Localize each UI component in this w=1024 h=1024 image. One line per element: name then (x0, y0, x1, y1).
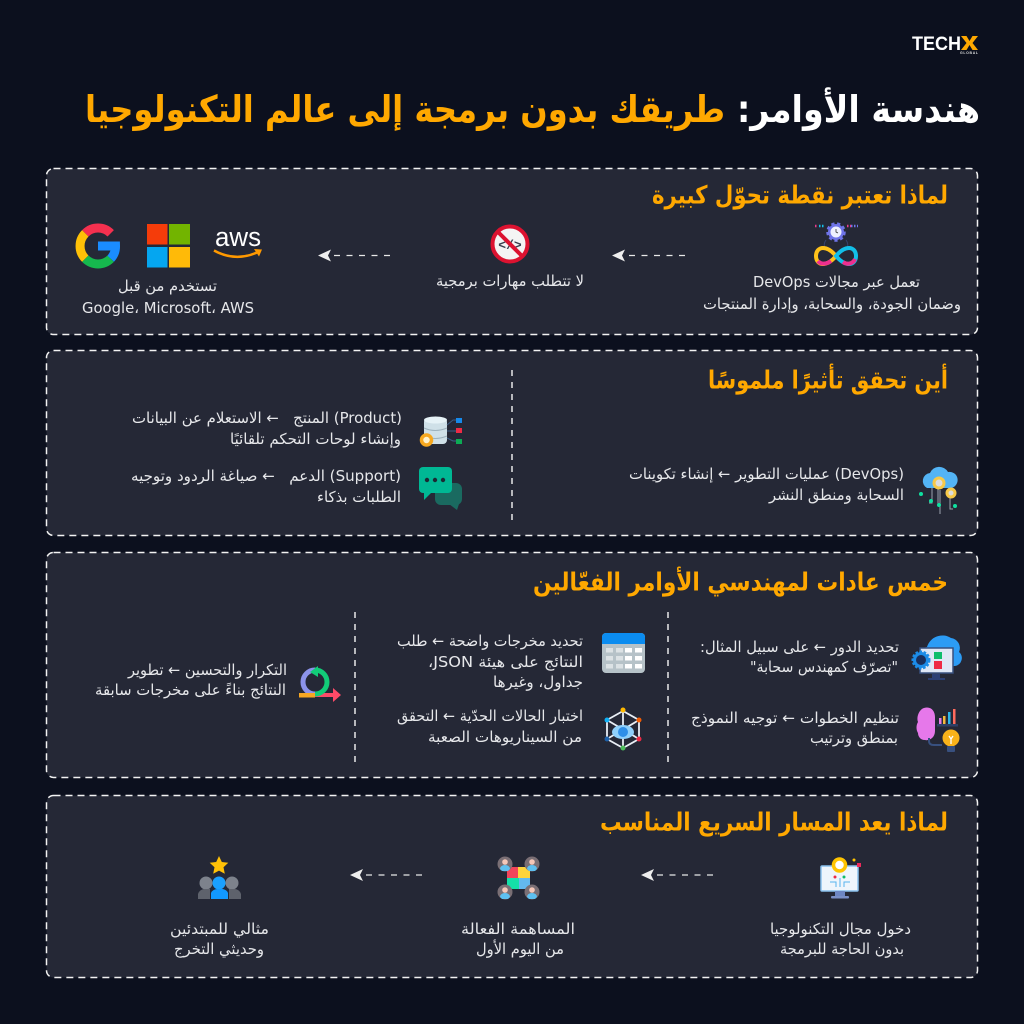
text: devops fields (703, 273, 961, 313)
text: product use: (Product) المنتج ← الاستعلام عن البيانات (132, 409, 402, 427)
text: edge cases: اختبار الحالات الحدّية ← التحقق (397, 707, 583, 725)
panel: where impact is real (46, 350, 978, 536)
arrow (318, 250, 390, 262)
icon: hexagon network (604, 708, 642, 750)
text: iterate: التكرار والتحسين ← تطوير (127, 661, 287, 679)
text: devops use: السحابة ومنطق النشر (768, 486, 904, 504)
text: ideal for beginners (170, 920, 269, 959)
text: define role (700, 638, 899, 676)
panel: fast track (46, 796, 978, 978)
text: enter tech (770, 920, 911, 958)
text: enter tech: دخول مجال التكنولوجيا (770, 920, 911, 938)
text: ideal for beginners: وحديثي التخرج (174, 940, 264, 959)
text: no programming needed: لا تتطلب مهارات برمجية (436, 272, 584, 290)
icon: iteration loop (299, 666, 341, 702)
icon: monitor with gear (821, 858, 861, 898)
title: هندسة الأوامر: (737, 86, 980, 131)
text: edge cases: من السيناريوهات الصعبة (428, 728, 582, 746)
logo: TechX Global: GLOBAL (960, 51, 979, 55)
text: clear outputs: تحديد مخرجات واضحة ← طلب (397, 632, 583, 650)
icon: aws logo: aws (215, 222, 261, 252)
icon: devops infinity gear (815, 224, 858, 264)
text: support use (131, 467, 401, 506)
text: contribute from day one: من اليوم الأول (476, 939, 564, 958)
heading: five habits: خمس عادات لمهندسي الأوامر الفعّالين (533, 566, 948, 598)
icon: no code (492, 226, 528, 262)
text: product use (132, 409, 402, 448)
heading: where impact is real: أين تحقق تأثيرًا ملموسًا (708, 364, 948, 396)
text: iterate: النتائج بناءً على مخرجات سابقة (95, 681, 286, 699)
icon: brain chart bulb (916, 708, 960, 752)
text: devops use: (DevOps) عمليات التطوير ← إنشاء تكوينات (629, 465, 904, 483)
text: devops fields: وضمان الجودة، والسحابة، وإدارة المنتجات (703, 295, 961, 313)
panel: five habits (46, 552, 978, 778)
text: define role: تحديد الدور ← على سبيل المثال: (700, 638, 899, 656)
text: clear outputs: النتائج على هيئة JSON، (428, 653, 583, 671)
text: ideal for beginners: مثالي للمبتدئين (170, 920, 269, 939)
text: support use: الطلبات بذكاء (317, 488, 401, 506)
text: support use: (Support) الدعم ← صياغة الردود وتوجيه (131, 467, 401, 485)
text: organize steps (691, 709, 899, 747)
icon: no code: </> (498, 238, 522, 253)
text: devops use (629, 465, 904, 504)
icon: chat bubbles (419, 467, 462, 510)
text: enter tech: بدون الحاجة للبرمجة (780, 940, 904, 958)
text: organize steps: تنظيم الخطوات ← توجيه النموذج (691, 709, 899, 728)
text: used by: Google، Microsoft، AWS (82, 299, 254, 317)
text: contribute from day one: المساهمة الفعالة (461, 920, 575, 938)
heading: why a turning point: لماذا تعتبر نقطة تحوّل كبيرة (652, 180, 948, 210)
text: organize steps: بمنطق وترتيب (810, 729, 898, 747)
text: define role: "تصرّف كمهندس سحابة" (750, 658, 898, 676)
text: clear outputs: جداول، وغيرها (493, 673, 583, 691)
text: devops fields: تعمل عبر مجالات DevOps (753, 273, 920, 291)
heading: fast track: لماذا يعد المسار السريع المناسب (600, 808, 948, 838)
text: product use: وإنشاء لوحات التحكم تلقائيًا (230, 430, 401, 448)
icon: team puzzle (498, 856, 540, 900)
text: edge cases (397, 707, 583, 746)
icon: cloud gears (919, 467, 958, 514)
icon: people with star (198, 856, 241, 899)
text: used by: تستخدم من قبل (118, 277, 217, 295)
arrow (612, 250, 685, 262)
title: طريقك بدون برمجة إلى عالم التكنولوجيا (85, 88, 725, 131)
text: iterate (95, 661, 287, 699)
text: clear outputs (397, 632, 583, 691)
icon: database (422, 416, 462, 445)
icon: microsoft logo (147, 224, 190, 268)
icon: table (602, 633, 645, 673)
logo: TechX Global: TECH (912, 33, 961, 55)
icon: google logo (80, 228, 116, 264)
arrow (641, 869, 713, 881)
text: used by (82, 277, 254, 317)
arrow (350, 869, 422, 881)
panel: why a turning point (46, 168, 978, 334)
text: contribute from day one (461, 920, 575, 958)
icon: cloud engineer monitor (913, 635, 962, 680)
